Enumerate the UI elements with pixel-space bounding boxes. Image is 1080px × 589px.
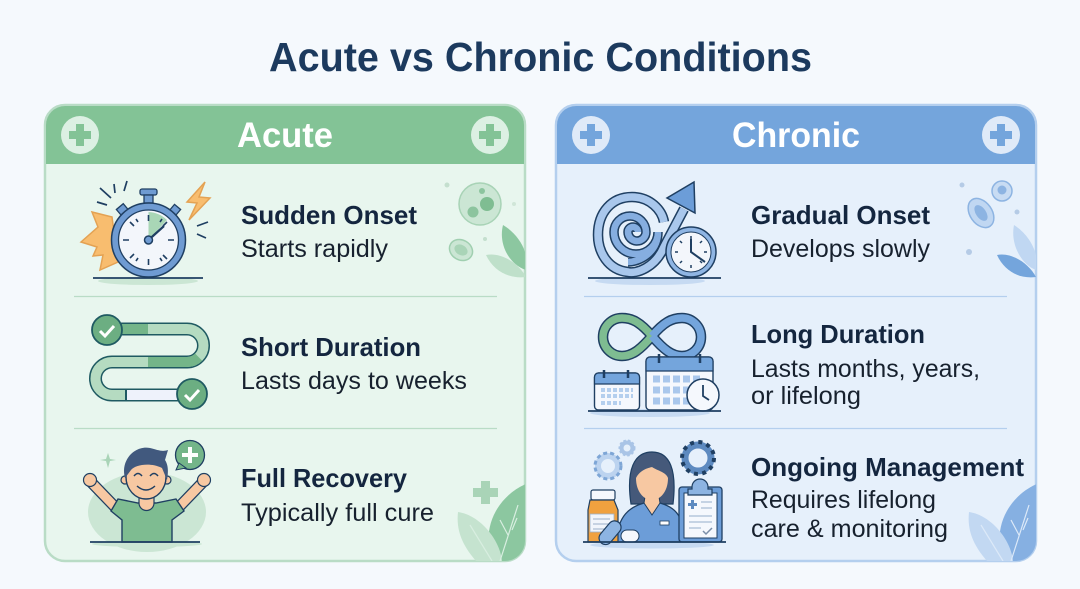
icon: infinity and calendars	[588, 318, 721, 417]
long duration text: or lifelong	[751, 382, 861, 410]
row: short duration	[92, 315, 467, 409]
long duration text: Long Duration	[751, 319, 925, 349]
row: long duration	[588, 318, 980, 417]
sudden onset text: Starts rapidly	[241, 235, 388, 263]
long duration text	[751, 319, 980, 410]
short duration text: Lasts days to weeks	[241, 367, 467, 395]
long duration text: Lasts months, years,	[751, 355, 980, 383]
full recovery text	[241, 463, 434, 527]
panel: acute	[45, 105, 527, 561]
row: ongoing management	[583, 440, 1024, 548]
icon: clinician with medicine and gears	[583, 440, 726, 548]
ongoing management text: care & monitoring	[751, 515, 948, 543]
sudden onset text	[241, 200, 417, 263]
chronic header: Chronic	[732, 116, 860, 155]
acute header	[46, 106, 524, 164]
title: Acute vs Chronic Conditions	[269, 34, 812, 80]
icon: stopwatch	[81, 181, 210, 285]
decoration: cells and leaves	[444, 182, 527, 561]
icon: happy person	[84, 440, 210, 552]
row: sudden onset	[81, 181, 417, 285]
icon: spiral arrow and clock	[588, 182, 721, 285]
full recovery text: Full Recovery	[241, 463, 408, 493]
acute header: Acute	[237, 116, 333, 155]
gradual onset text	[751, 200, 930, 263]
short duration text: Short Duration	[241, 332, 421, 362]
decoration: cells and leaves	[960, 181, 1037, 561]
gradual onset text: Develops slowly	[751, 235, 930, 263]
ongoing management text	[751, 452, 1024, 543]
chronic header	[557, 106, 1035, 164]
ongoing management text: Requires lifelong	[751, 486, 936, 514]
sudden onset text: Sudden Onset	[241, 200, 417, 230]
gradual onset text: Gradual Onset	[751, 200, 930, 230]
row: gradual onset	[588, 182, 930, 285]
icon: winding path	[92, 315, 207, 409]
short duration text	[241, 332, 467, 395]
panel: chronic	[556, 105, 1037, 561]
full recovery text: Typically full cure	[241, 499, 434, 527]
ongoing management text: Ongoing Management	[751, 452, 1024, 482]
row: full recovery	[84, 440, 434, 552]
